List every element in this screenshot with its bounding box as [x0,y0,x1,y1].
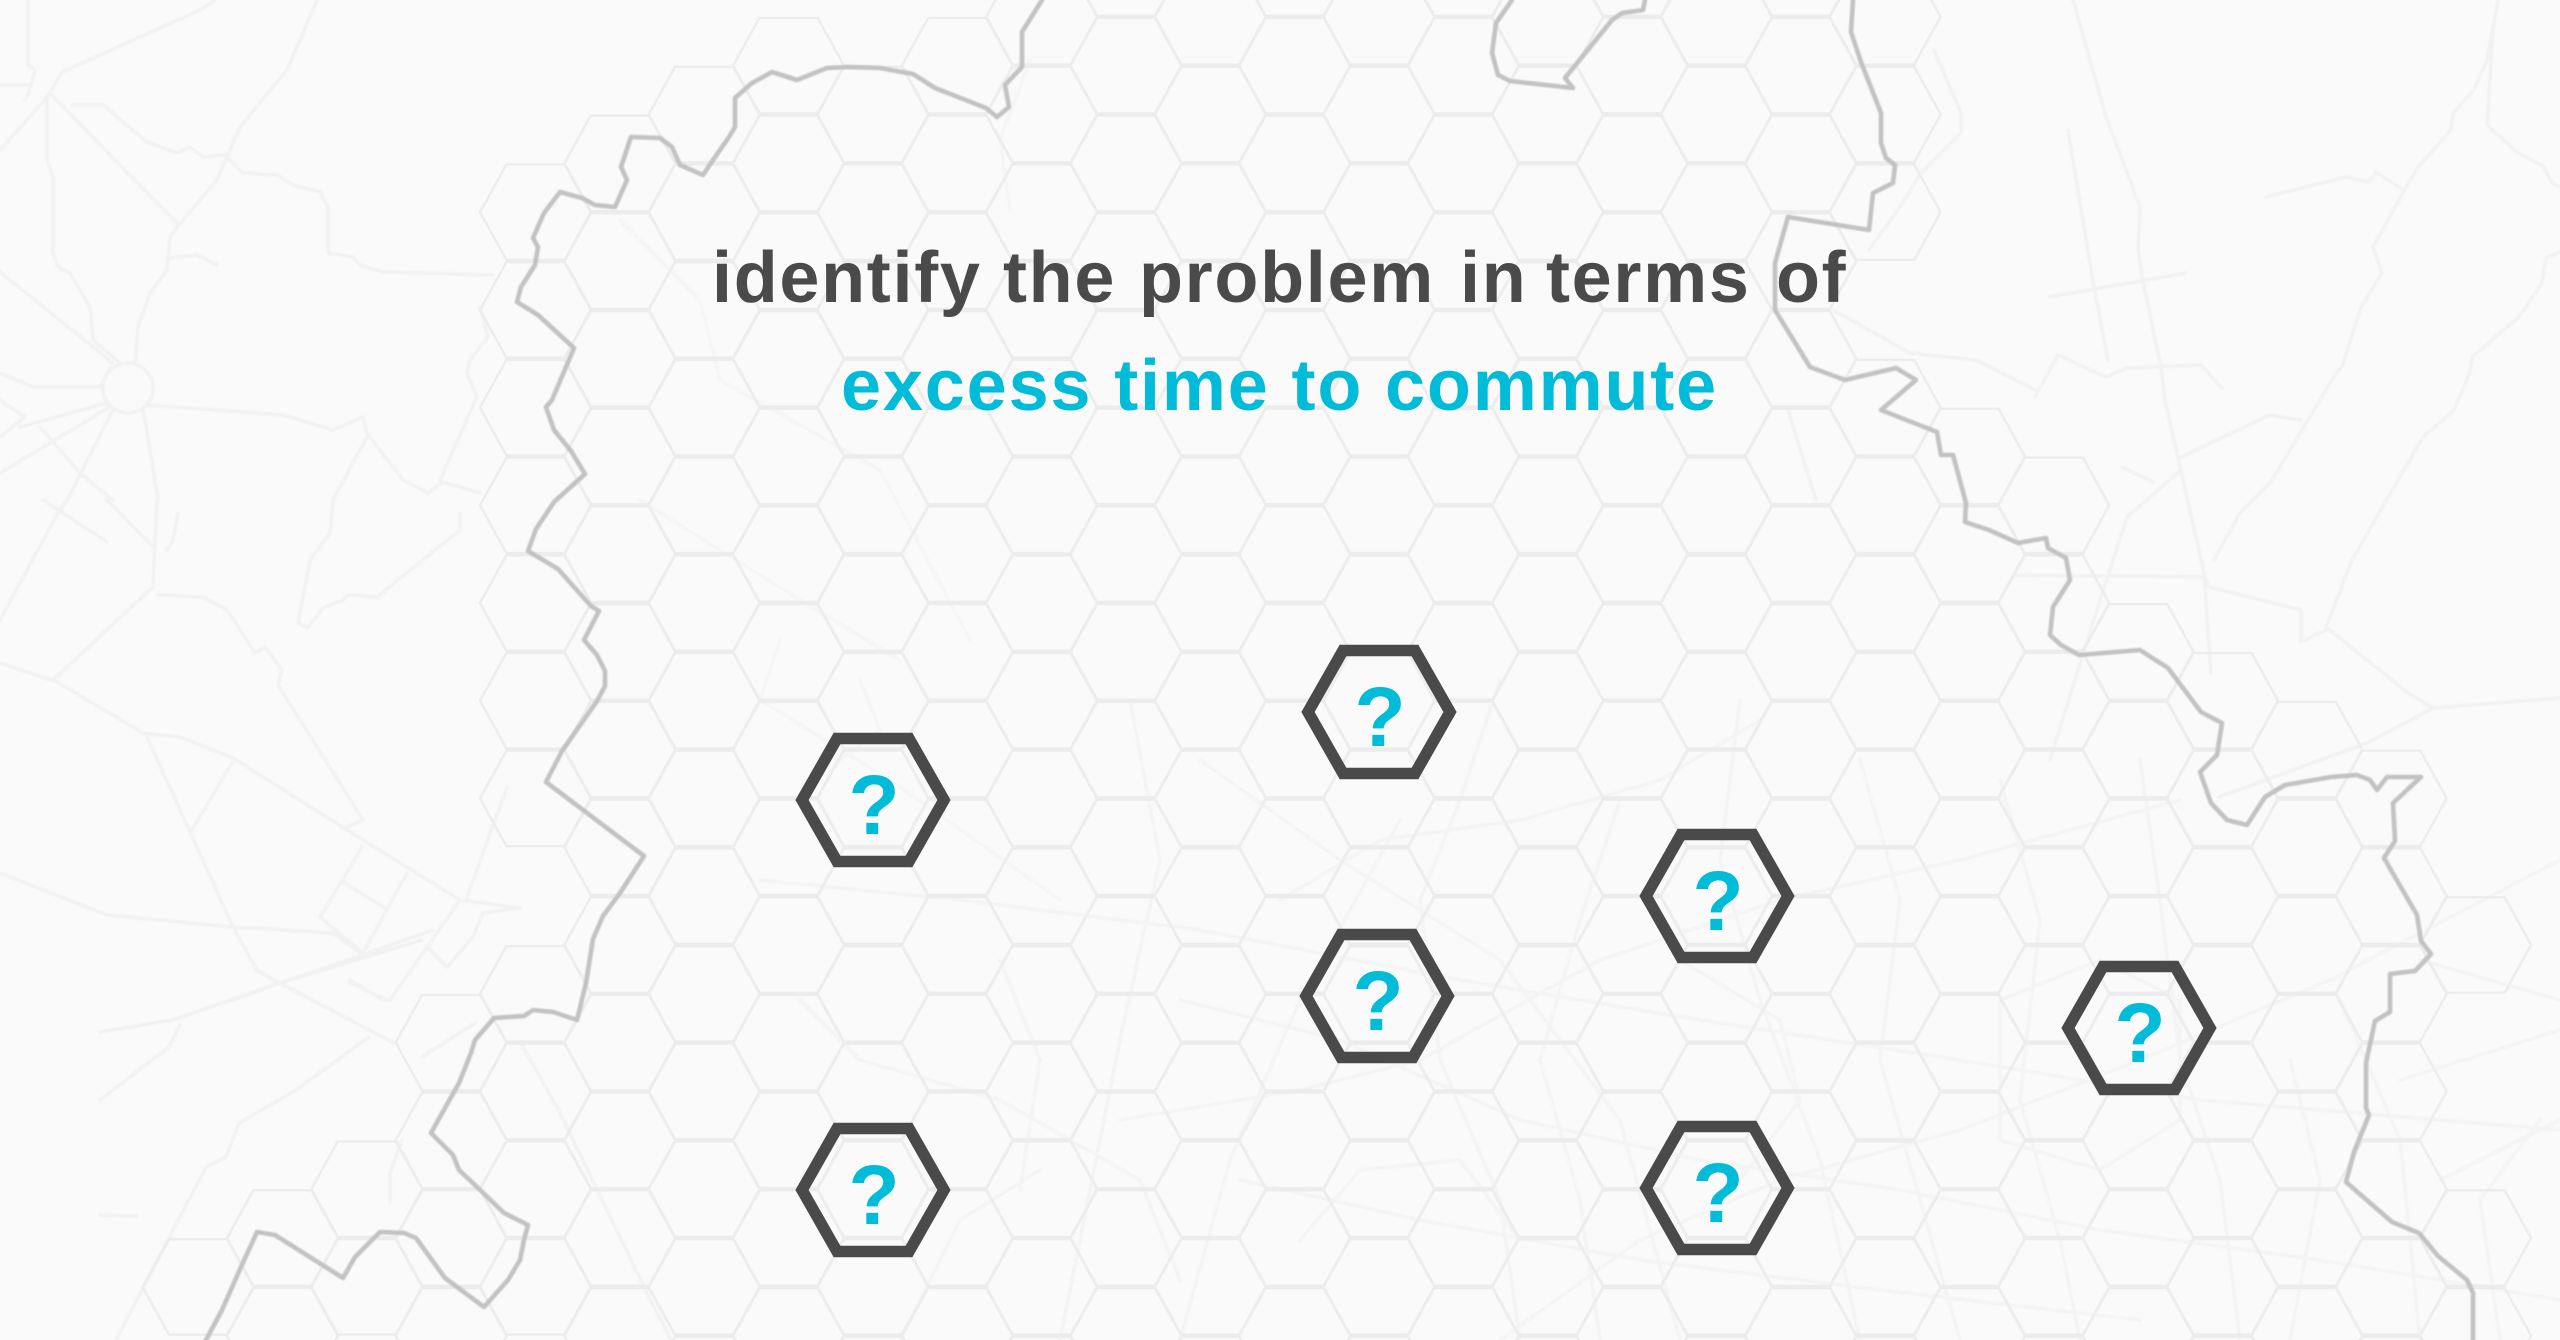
boundary: west and north section [206,0,1042,1340]
title [712,238,1847,426]
marker: lower right: ? [1692,1146,1744,1240]
marker: far right: ? [2114,986,2166,1080]
marker: upper left [802,738,944,862]
title line 1: identify [712,238,982,318]
marker: right centre [1646,834,1788,958]
marker: top centre [1308,650,1450,774]
title line 1: the [1003,238,1116,318]
marker: centre [1306,934,1448,1058]
boundary: north notch section [1492,0,1645,88]
question markers [802,650,2210,1252]
marker: lower left [802,1128,944,1252]
marker: right centre: ? [1692,854,1744,948]
marker: upper left: ? [848,758,900,852]
marker: top centre: ? [1354,670,1406,764]
boundary: north-east and east section [1775,0,2473,1340]
title line 1: in [1460,238,1527,318]
title line 1: problem [1139,238,1435,318]
marker: centre: ? [1352,954,1404,1048]
marker: lower left: ? [848,1148,900,1242]
marker: lower right [1646,1126,1788,1250]
title line 1: terms [1546,238,1751,318]
title line 1: of [1776,238,1847,318]
title line 2 highlight: excess time to commute [841,346,1718,426]
marker: far right [2068,966,2210,1090]
